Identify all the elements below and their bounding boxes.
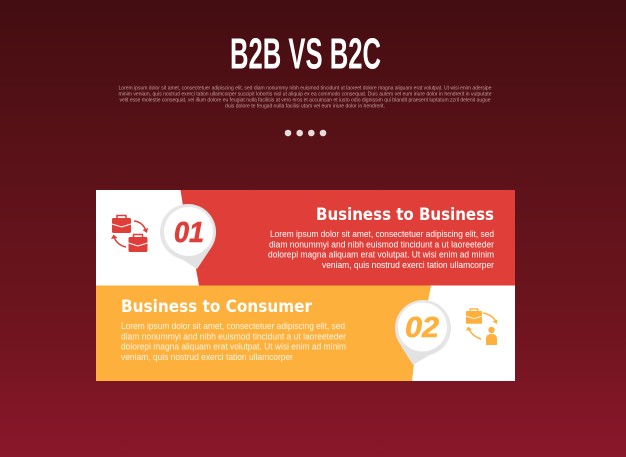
icon: briefcase and person exchange [466,309,498,345]
subtitle text block: minim veniam, quis nostrud exerci tation ullamcorper suscipit lobortis nisl ut aliquip ex ea commodo consequat. Duis autem vel eum iriure dolor in hendrerit in vulputate [118,92,492,98]
body text: veniam, quis nostrud exerci tation ullamcorper [121,352,293,362]
white left area [96,190,199,286]
title: B2B VS B2C [230,30,381,78]
body text: veniam, quis nostrud exerci tation ullamcorper [322,260,494,270]
heading: Business to Business [316,205,494,224]
body text: diam nonummyi and nibh euismod tincidunt a ut laoreeteder [121,331,346,341]
pin marker 01 [160,204,216,269]
subtitle text block [118,86,492,110]
body text: Lorem ipsum dolor sit amet, consectetuer adipiscing elit, sed [270,229,494,239]
body text: dolorepi magna aliquam erat volutpat. Ut wisi enim ad minim [121,342,346,352]
body text [121,321,346,362]
subtitle text block: duis dolore te feugait nulla facilisi utam vel eum iriure dolor in hendrerit. [225,104,385,110]
subtitle text block: Lorem ipsum dolor sit amet, consectetuer adipiscing elit, sed diam nonummy nibh euismod tincidunt ut laoreet dolore magna aliquam erat volutpat. Ut wisi enim adersipe [118,86,492,92]
white right area [412,286,515,381]
subtitle text block: velit esse molestie consequat, vel illum dolore eu feugiat nulla facilisis at vero eros et accumsan et iusto odio dignissim qui blandit praesent luptatum zzril delenit augue [120,98,490,104]
panel: business to consumer [96,286,515,381]
icon: briefcases exchange [111,216,148,252]
pin marker 02: 02 [405,312,439,344]
panel: business to business [96,190,515,286]
pin marker 02 [395,300,451,365]
body text [268,229,494,270]
pin marker 01: 01 [174,217,204,249]
body text: Lorem ipsum dolor sit amet, consectetuer adipiscing elit, sed [121,321,345,331]
heading: Business to Consumer [121,297,313,316]
body text: dolorepi magna aliquam erat volutpat. Ut wisi enim ad minim [268,250,494,260]
body text: diam nonummyi and nibh euismod tincidunt a ut laoreeteder [269,239,494,249]
pagination dots [285,130,326,136]
